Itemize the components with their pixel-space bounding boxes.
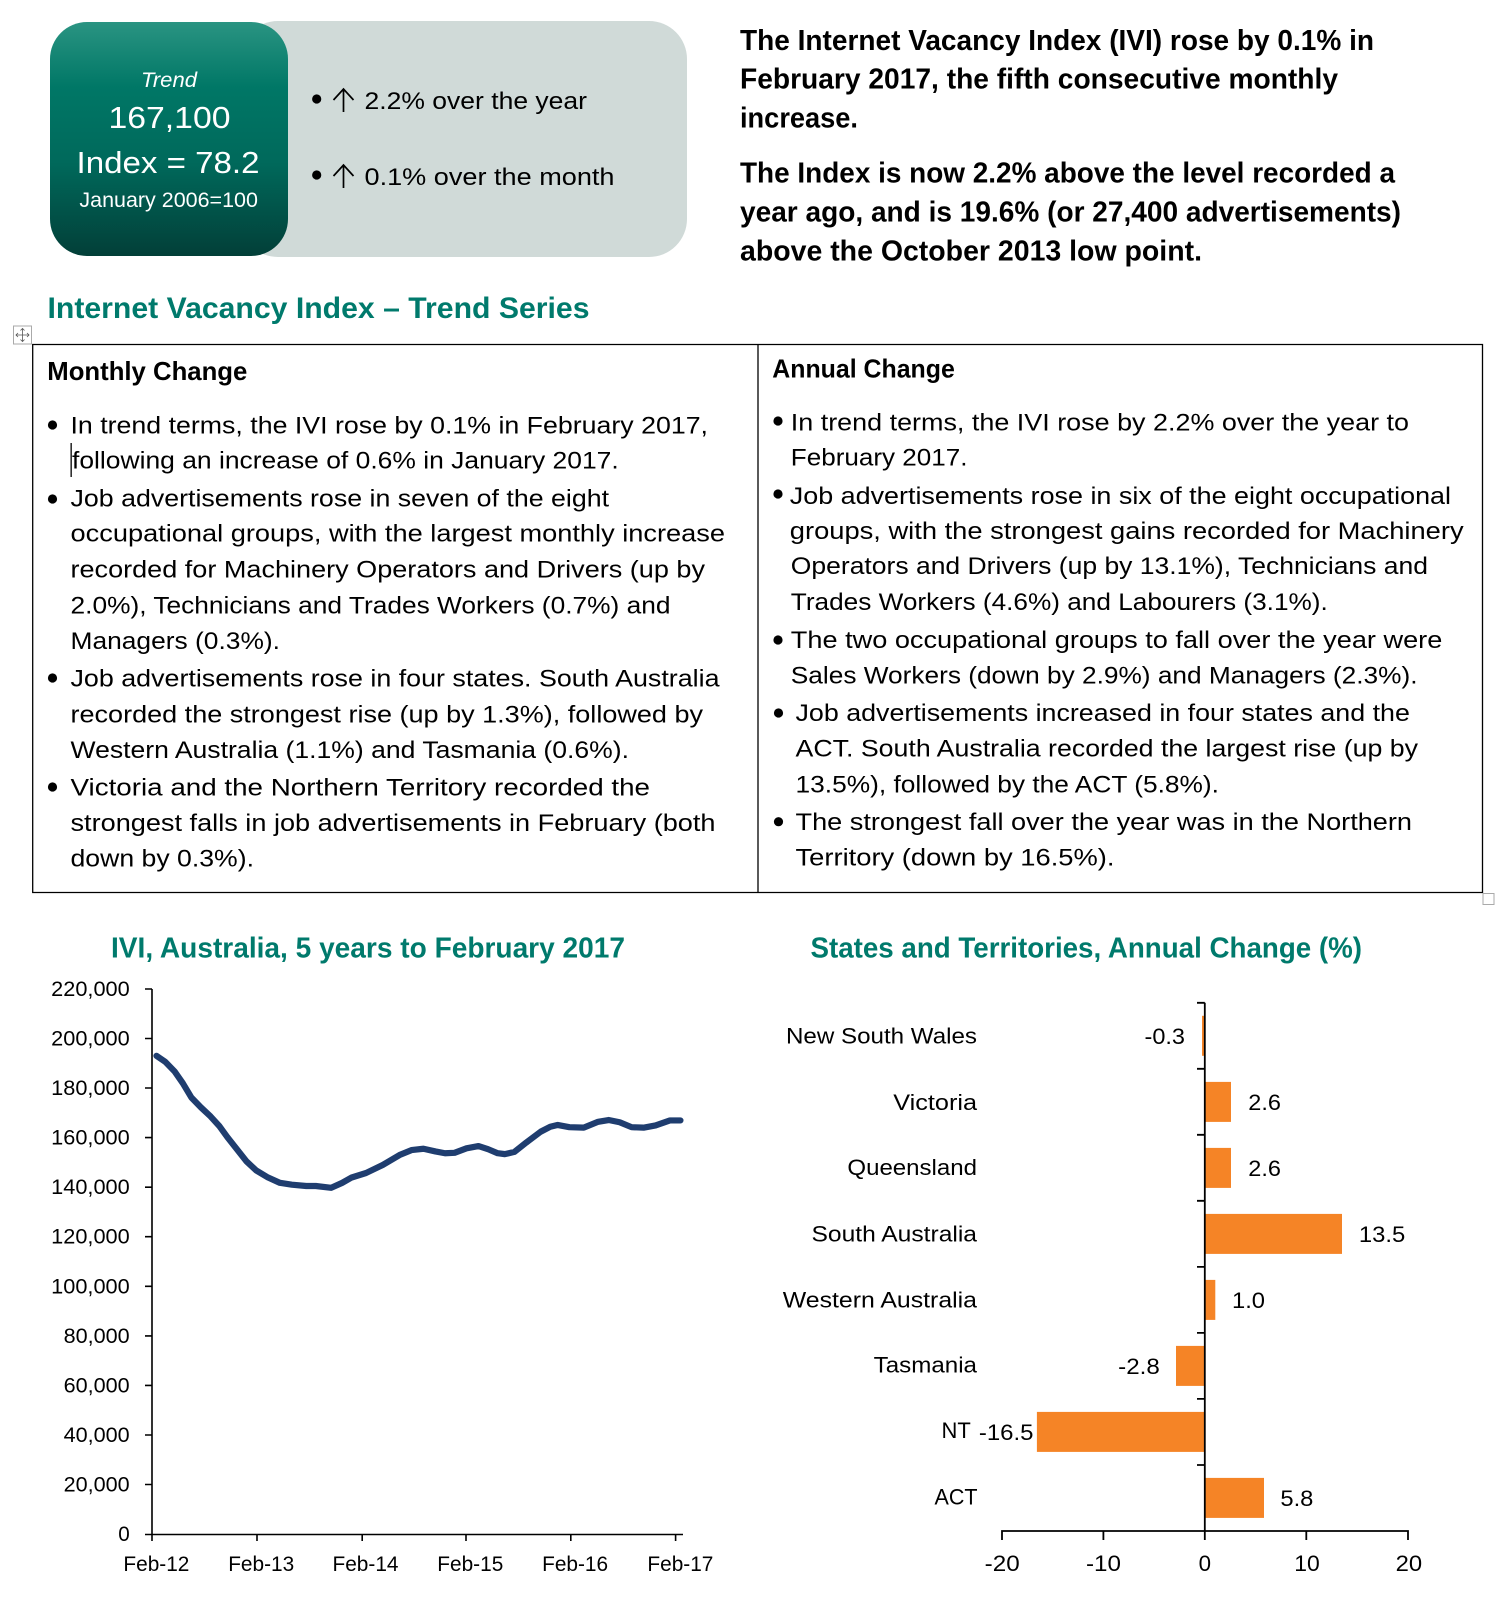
chart title: IVI Australia: IVI, Australia, 5 years to February 2017 [111,932,625,964]
y axis labels: 40,000 [64,1424,130,1447]
bars [1037,1016,1342,1518]
column: monthly change: strongest falls in job advertisements in February (both [70,810,716,837]
headline text block: above the October 2013 low point. [740,236,1202,268]
column: annual change: In trend terms, the IVI rose by 2.2% over the year to [791,410,1409,437]
x axis labels [985,1551,1422,1576]
column: monthly change: Managers (0.3%). [70,628,280,655]
column: monthly change: recorded for Machinery Operators and Drivers (up by [70,556,706,584]
y axis labels: 140,000 [51,1176,130,1199]
category labels: South Australia [812,1222,978,1247]
column: annual change: Operators and Drivers (up by 13.1%), Technicians and [791,553,1428,580]
headline text block: The Index is now 2.2% above the level recorded a [740,158,1396,190]
x axis labels: -10 [1086,1551,1121,1576]
x axis labels: Feb-13 [228,1553,294,1576]
category labels [783,1024,978,1509]
value labels: 2.6 [1248,1156,1281,1181]
column: annual change: The strongest fall over the year was in the Northern [796,809,1412,836]
x axis labels: 0 [1199,1551,1211,1576]
column: annual change: Territory (down by 16.5%). [796,845,1114,872]
column: monthly change: Job advertisements rose in four states. South Australia [70,666,720,693]
column: annual change: February 2017. [791,445,968,472]
category labels: Queensland [847,1155,977,1180]
line chart: IVI Australia [51,978,713,1576]
x axis labels: Feb-15 [437,1553,503,1576]
y axis labels: 100,000 [51,1275,130,1298]
value labels: 2.6 [1248,1090,1281,1115]
section heading: Internet Vacancy Index – Trend Series [48,292,590,325]
icon: table move handle [14,326,32,344]
y axis labels: 20,000 [64,1474,130,1496]
trend index card: 167,100 [108,100,230,135]
y axis labels: 220,000 [51,978,130,1001]
y axis labels: 120,000 [51,1226,130,1249]
value labels: -2.8 [1118,1354,1160,1379]
column: monthly change: Victoria and the Northern Territory recorded the [70,774,650,801]
chart title: states and territories: States and Territories, Annual Change (%) [810,932,1362,964]
trend index card [50,22,288,256]
y axis labels: 180,000 [51,1077,130,1100]
category labels: Tasmania [874,1353,978,1378]
value labels: 13.5 [1359,1222,1405,1247]
x axis labels: -20 [985,1551,1020,1576]
category labels: New South Wales [786,1024,977,1049]
value labels [979,1024,1405,1511]
x axis labels: 20 [1396,1551,1422,1576]
value labels: 1.0 [1232,1288,1265,1313]
column: annual change: Annual Change [772,354,955,384]
trend index card: January 2006=100 [79,189,258,212]
panel: trend summary [50,21,687,257]
column: annual change: The two occupational groups to fall over the year were [791,627,1442,654]
x axis labels: Feb-16 [542,1553,608,1576]
y axis labels: 80,000 [64,1325,130,1348]
x axis labels: Feb-14 [332,1553,399,1576]
x axis labels [123,1553,713,1576]
column: monthly change: following an increase of 0.6% in January 2017. [72,447,619,474]
annual change item: 2.2% over the year [364,88,587,115]
chart axes [145,989,683,1541]
data line [156,1056,680,1188]
panel background [240,21,687,257]
table frame [33,344,1483,892]
monthly change item: 0.1% over the month [364,164,614,191]
column: monthly change: down by 0.3%). [70,846,254,873]
column: monthly change: Monthly Change [47,356,247,386]
chart axes [1002,1003,1408,1540]
column: annual change: Trades Workers (4.6%) and Labourers (3.1%). [791,589,1328,616]
column: monthly change: occupational groups, with the largest monthly increase [70,521,725,548]
bar chart: states and territories [783,1003,1422,1576]
trend index card: Index = 78.2 [76,145,260,180]
icon: table resize handle [1483,894,1494,904]
column: annual change: groups, with the strongest gains recorded for Machinery [790,518,1464,545]
category labels: Western Australia [783,1288,978,1313]
headline text block: February 2017, the fifth consecutive monthly [740,64,1338,96]
column: monthly change: Western Australia (1.1%) and Tasmania (0.6%). [70,737,629,764]
x axis labels: Feb-12 [123,1553,189,1576]
column: monthly change: 2.0%), Technicians and Trades Workers (0.7%) and [70,592,670,619]
headline text block [740,25,1401,268]
y axis labels: 160,000 [51,1127,130,1150]
headline text block: increase. [740,102,858,134]
category labels: ACT [934,1484,978,1509]
y axis labels: 60,000 [64,1374,130,1397]
value labels: -0.3 [1144,1024,1185,1049]
column: annual change: Sales Workers (down by 2.9%) and Managers (2.3%). [791,662,1418,689]
column: monthly change: Job advertisements rose in seven of the eight [70,486,609,513]
column: monthly change [47,356,725,873]
column: annual change: Job advertisements increased in four states and the [796,700,1410,727]
column: annual change [772,354,1464,872]
column: monthly change: recorded the strongest rise (up by 1.3%), followed by [70,702,704,729]
column: annual change: 13.5%), followed by the ACT (5.8%). [796,771,1219,798]
headline text block: year ago, and is 19.6% (or 27,400 advertisements) [740,197,1401,229]
value labels: 5.8 [1280,1486,1313,1511]
x axis labels: 10 [1294,1551,1320,1576]
value labels: -16.5 [979,1420,1034,1445]
trend index card: Trend [141,68,198,92]
category labels: NT [942,1418,971,1443]
column: monthly change: In trend terms, the IVI rose by 0.1% in February 2017, [70,412,708,439]
table: trend series commentary [33,344,1483,892]
column: annual change: Job advertisements rose in six of the eight occupational [790,483,1451,510]
category labels: Victoria [893,1090,978,1115]
headline text block: The Internet Vacancy Index (IVI) rose by 0.1% in [740,25,1374,57]
y axis labels: 0 [118,1523,130,1546]
x axis labels: Feb-17 [647,1553,713,1576]
y axis labels [51,978,130,1546]
y axis labels: 200,000 [51,1028,130,1050]
column: annual change: ACT. South Australia recorded the largest rise (up by [796,736,1419,763]
